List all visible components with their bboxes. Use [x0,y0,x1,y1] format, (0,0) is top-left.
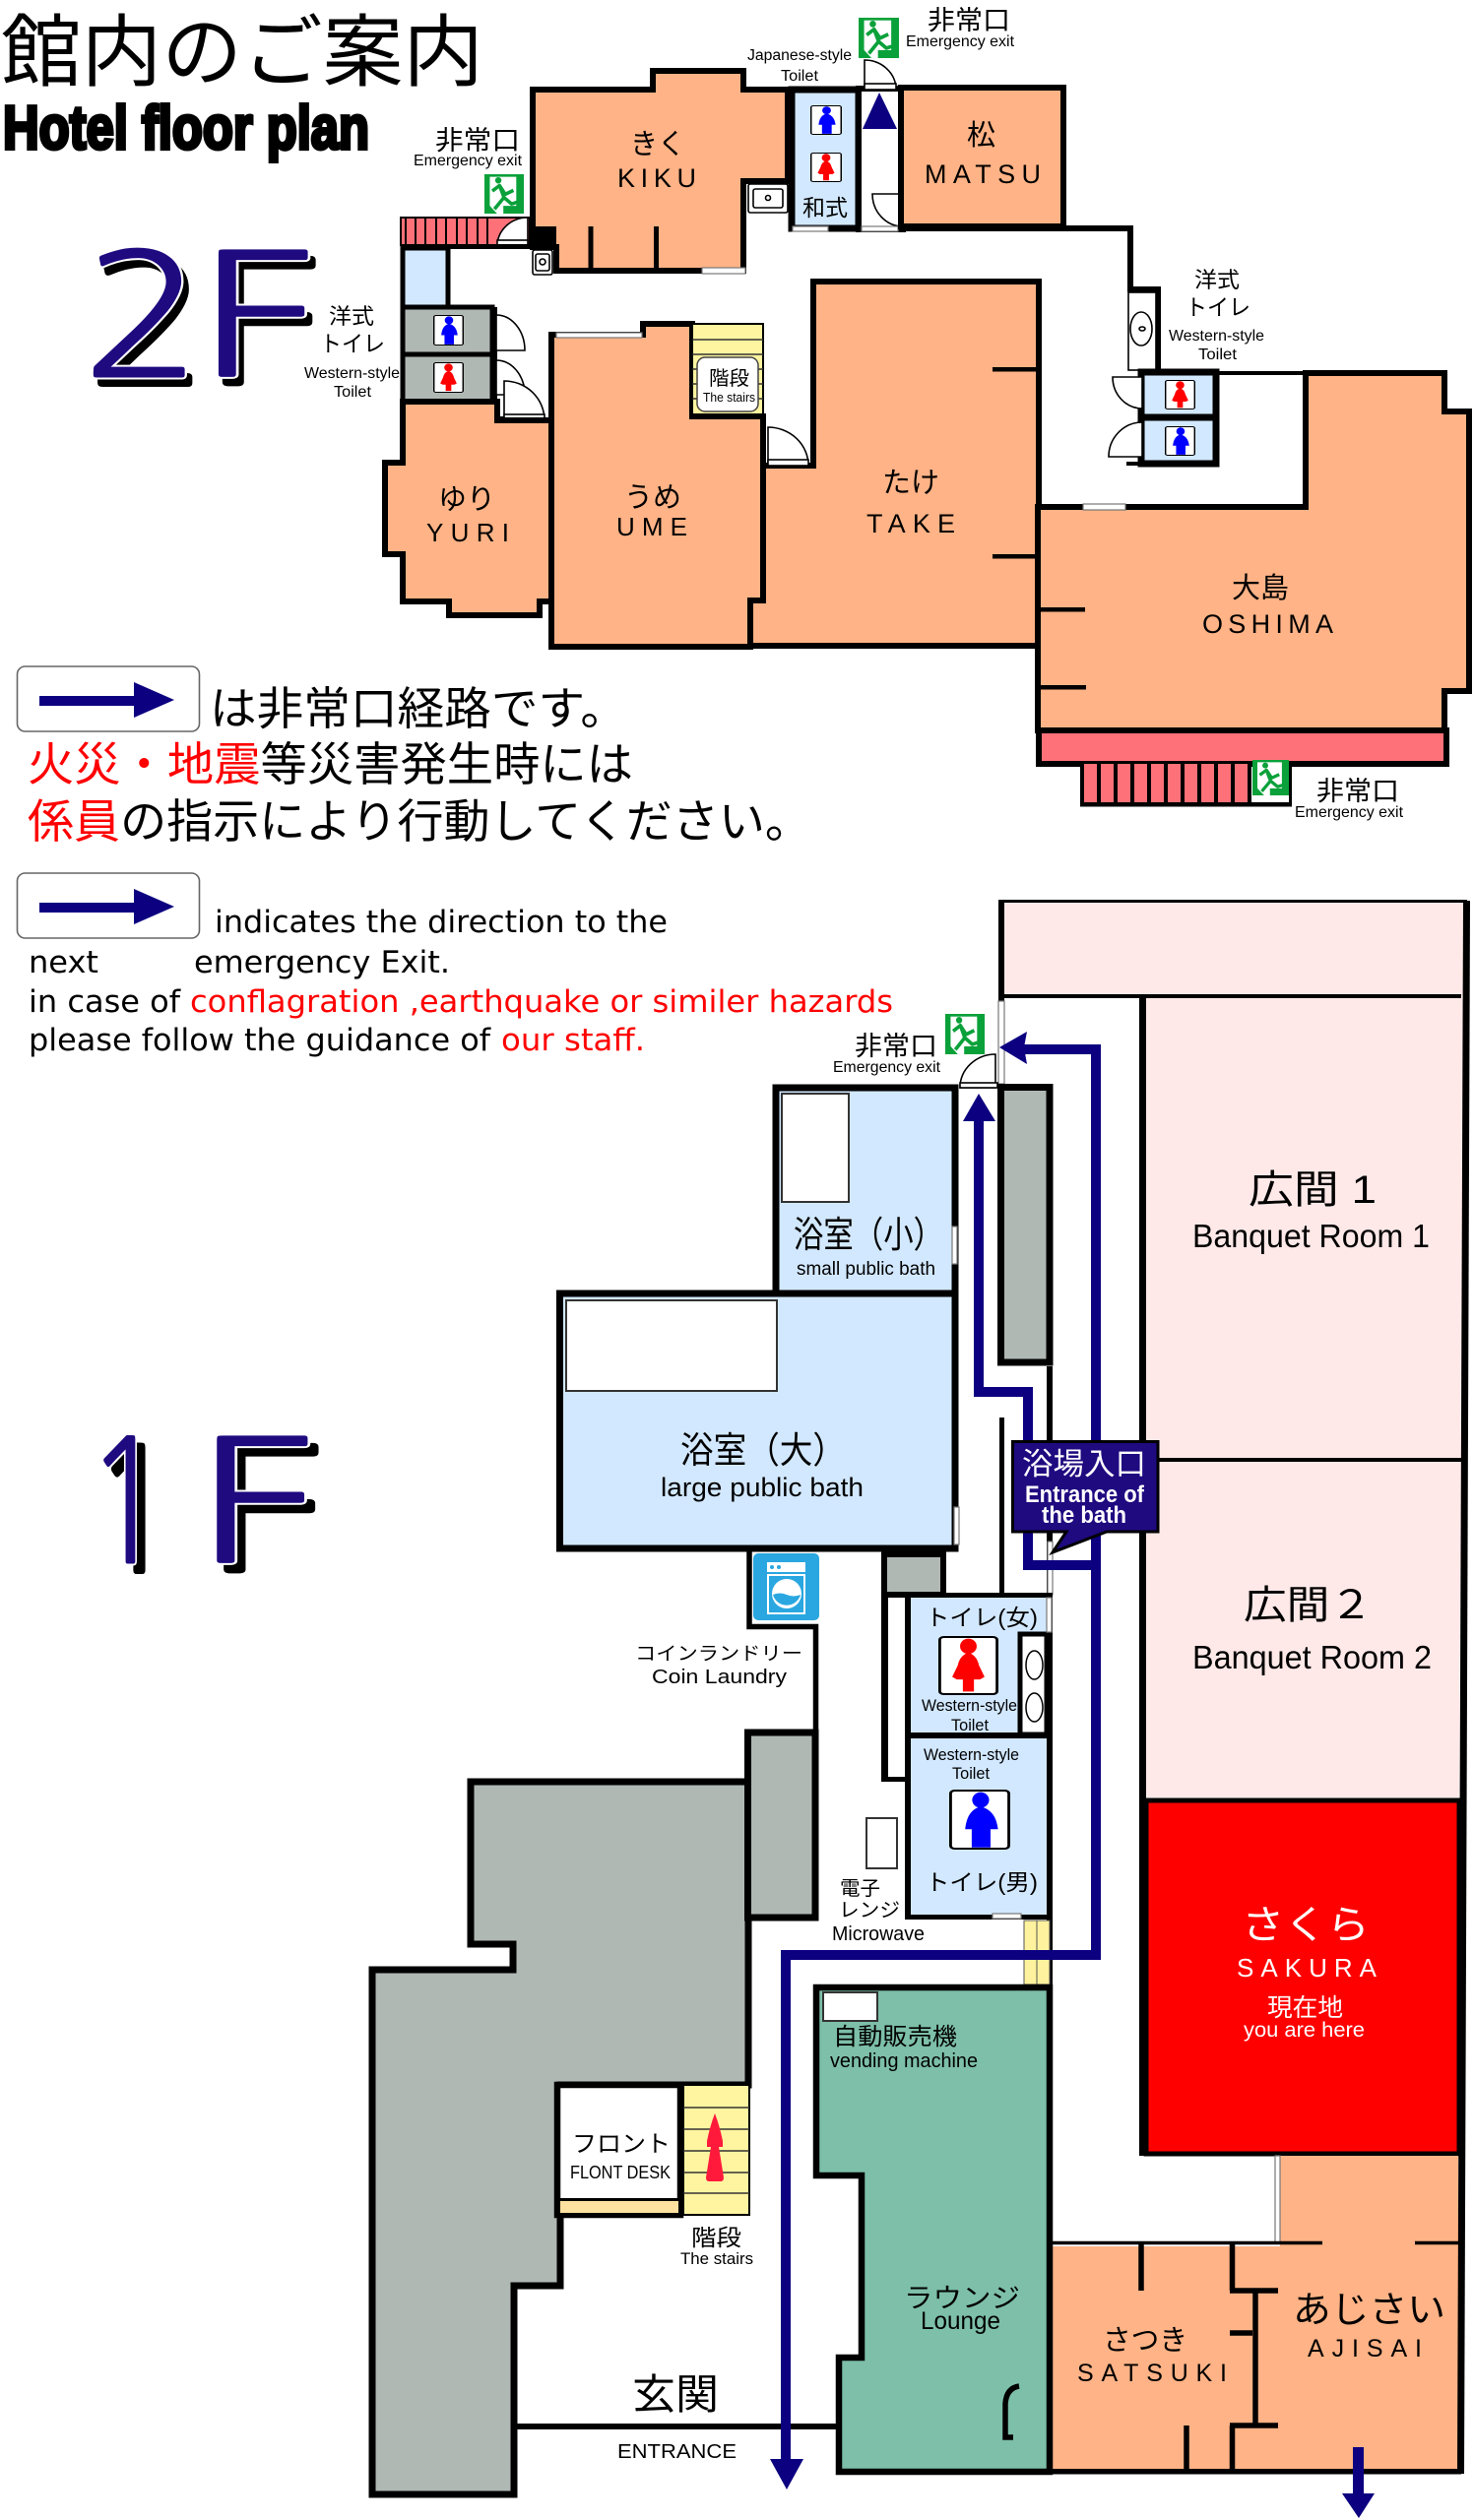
legend: English: in case of [29,984,181,1020]
emergency exit: north corridor: Emergency exit [906,33,1015,50]
room: TAKE [750,282,1039,646]
floor label: 2F [81,230,322,410]
emergency exit: south stairs: Emergency exit [1295,804,1404,821]
room: YURI: ゆり [438,484,495,516]
microwave [832,1818,925,1945]
evacuation route: main [770,1032,1096,2489]
legend: English: our staff. [501,1023,645,1058]
toilet: women: トイレ(女) [926,1605,1038,1630]
toilets: west: トイレ [320,331,385,356]
stairs: 2F: The stairs [703,390,755,405]
2F floor plan [304,6,1469,821]
microwave: 電子 [840,1878,880,1900]
room: SATSUKI and AJISAI: さつき [1103,2325,1187,2357]
floor label: 1F: F [204,1425,325,1598]
legend: Japanese: 係員の指示により行動してください。 [28,795,811,848]
room: UME: うめ [624,482,681,514]
stairs: 1F: The stairs [680,2249,753,2268]
room: OSHIMA [1038,373,1469,730]
legend arrow box [18,666,199,731]
emergency exit: north-west stairs: Emergency exit [414,153,523,169]
room: Lounge: vending machine [830,2050,978,2072]
toilet: men [905,1738,1053,1920]
toilets: east: 洋式 [1194,268,1240,292]
toilet: Japanese style: 和式 [802,195,848,220]
toilet: women: Western-style [922,1696,1017,1715]
room: upper pink strip [998,900,1467,1084]
legend: English: next [29,945,98,980]
emergency exit: north-west stairs [401,126,533,249]
room partitions [1141,2243,1278,2470]
emergency exit: north-west stairs: 非常口 [435,126,520,156]
room: Banquet Room 2: Banquet Room 2 [1192,1639,1432,1675]
room: YURI: YURI [426,518,509,547]
room: SAKURA, you are here: you are here [1244,2019,1365,2042]
legend: Japanese [18,666,811,848]
toilet: women [905,1593,1053,1920]
toilet: men: Western-style [924,1745,1019,1764]
room: large public bath: 浴室（大） [680,1430,846,1471]
room: MATSU: 松 [967,119,995,152]
storage: main gray area [372,1782,748,2494]
room: SATSUKI and AJISAI: あじさい [1293,2290,1445,2330]
storage: gray block beside laundry [748,1732,815,1918]
room: large public bath: large public bath [661,1473,864,1502]
toilets: east [1109,268,1308,466]
toilets: west [304,304,545,421]
toilets: west: Western-style [304,365,400,382]
room: Lounge: ラウンジ [904,2284,1020,2313]
front desk: フロント [572,2131,671,2158]
front desk [557,2085,680,2215]
room: UME [551,324,763,647]
emergency exit: 1F [833,1014,997,1088]
room: UME: UME [616,512,687,541]
room: KIKU [533,71,788,275]
callout: entrance of the bath: Entrance of [1025,1481,1145,1508]
legend: Japanese: 火災・地震等災害発生時には [28,738,633,790]
coin laundry: コインランドリー [635,1644,802,1665]
floor label: 1F: 1 [93,1425,177,1598]
stairs: 1F: 階段 [691,2225,741,2250]
room: TAKE: TAKE [866,509,955,538]
room: SAKURA, you are here: SAKURA [1237,1953,1378,1983]
emergency exit: 1F: 非常口 [855,1032,937,1061]
entrance: ENTRANCE [617,2441,737,2463]
room: SATSUKI and AJISAI: SATSUKI [1077,2360,1227,2387]
callout: entrance of the bath: the bath [1042,1502,1126,1529]
legend: English: conflagration ,earthquake or similer hazards [190,984,893,1020]
stairs: 2F: 階段 [709,367,749,390]
microwave: Microwave [832,1923,925,1945]
legend: Japanese: は非常口経路です。 [210,683,627,734]
front desk: FLONT DESK [570,2163,671,2182]
emergency exit: north corridor [859,6,1015,231]
coin laundry: Coin Laundry [652,1667,787,1688]
corridor wall and east sink [900,228,1158,372]
room: Lounge: Lounge [921,2307,1000,2335]
room: SATSUKI and AJISAI [1052,2156,1458,2470]
room: SAKURA, you are here: 現在地 [1267,1994,1343,2022]
title: Hotel floor plan [3,94,369,162]
room: YURI [385,402,551,615]
toilet: men: Toilet [952,1764,990,1783]
toilets: east: Western-style [1169,328,1264,345]
toilets: east: Toilet [1198,346,1238,363]
room: KIKU: きく [630,129,685,160]
room: Lounge: 自動販売機 [833,2024,957,2050]
room: Banquet Room 2 [1145,1458,1462,1797]
outer walls: banquet wing [836,901,1470,2475]
room: small public bath: 浴室（小） [794,1215,943,1255]
room: Banquet Room 1: Banquet Room 1 [1192,1218,1430,1254]
coin laundry [635,1551,819,1735]
passage: yellow steps [1024,1921,1050,1984]
floor label: 2F: 2 [87,238,210,410]
storage: corridor gray block [1000,1087,1050,1362]
room: SAKURA, you are here: さくら [1242,1904,1370,1947]
legend: English [18,873,893,1058]
toilets: west: Toilet [334,384,372,401]
floor label: 2F: F [203,238,322,410]
stairs: 1F [680,2085,753,2268]
legend: English: please follow the guidance of [29,1023,491,1058]
emergency exit: 1F: Emergency exit [833,1059,941,1076]
legend: English: emergency Exit. [194,945,450,980]
storage: small gray block [884,1554,943,1595]
toilet: Japanese style: Japanese-style [747,47,852,64]
evacuation arrow: AJISAI exit [1342,2447,1375,2518]
toilet: women: Toilet [951,1716,989,1734]
room: MATSU [901,88,1063,226]
room: SAKURA, you are here [1146,1800,1459,2154]
floor label: 1F [84,1417,325,1598]
toilet: Japanese style [747,47,859,231]
room: SATSUKI and AJISAI: AJISAI [1308,2335,1422,2362]
entrance [514,2371,839,2463]
room: OSHIMA: 大島 [1232,572,1289,604]
room: Lounge [816,1987,1050,2472]
room: small public bath: small public bath [797,1259,935,1280]
toilets: east: トイレ [1186,294,1250,320]
room: Banquet Room 2: 広間２ [1244,1584,1373,1627]
callout: entrance of the bath: 浴場入口 [1022,1447,1146,1481]
floor label: 1F: 1 [84,1417,168,1589]
emergency exit: south stairs: 非常口 [1316,777,1399,806]
floor label: 1F: F [195,1417,316,1589]
emergency exit: south stairs [1039,730,1446,821]
emergency exit: north corridor: 非常口 [928,6,1010,35]
legend: English: indicates the direction to the [215,905,668,940]
room: MATSU: MATSU [925,159,1041,189]
floor label: 2F: F [197,230,316,403]
1F floor plan [372,900,1470,2518]
microwave: レンジ [839,1900,900,1922]
corridor partitions [881,1418,1053,1782]
title: 館内のご案内 [1,9,483,96]
room: KIKU: KIKU [617,163,696,193]
room: Banquet Room 1: 広間 1 [1249,1168,1377,1212]
toilet: Japanese style: Toilet [781,68,819,85]
stairs: 2F [689,324,764,419]
room: TAKE: たけ [882,468,939,499]
title [1,9,483,162]
washroom: north-west [403,248,448,307]
floor label: 2F: 2 [81,230,204,403]
callout: entrance of the bath [1012,1441,1158,1552]
room: OSHIMA: OSHIMA [1202,609,1333,639]
toilets: west: 洋式 [329,304,374,329]
room: large public bath [559,1293,959,1548]
evacuation route: bath corridor [963,1094,1096,1565]
room: Banquet Room 1 [1145,998,1463,1459]
room: small public bath [776,1088,957,1293]
toilet: men: トイレ(男) [926,1869,1038,1895]
entrance: 玄関 [632,2371,719,2418]
legend arrow box [18,873,199,938]
